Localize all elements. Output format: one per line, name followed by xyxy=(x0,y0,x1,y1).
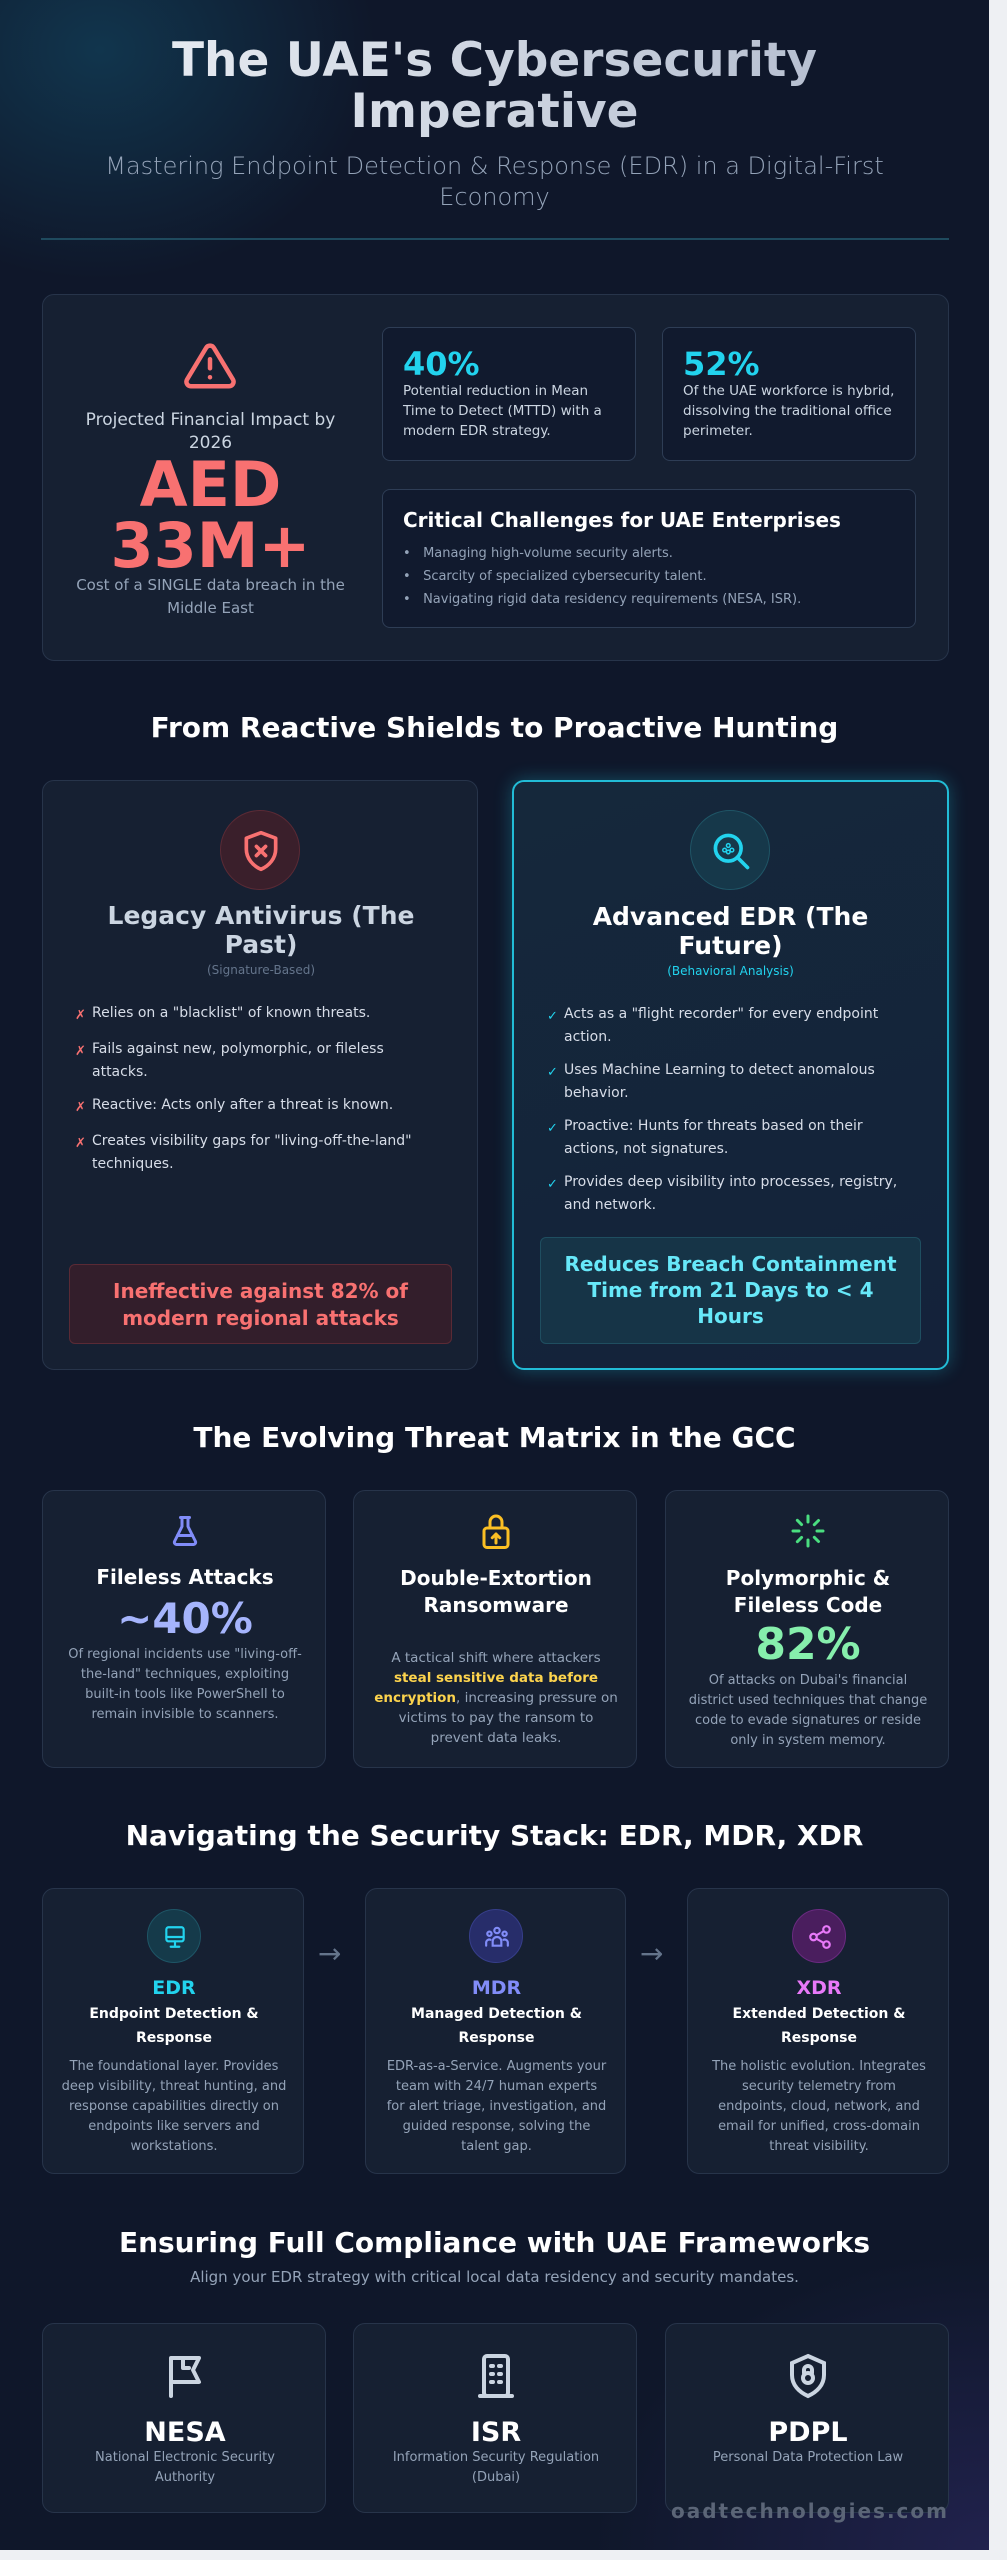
list: legacy drawbacks: Relies on a "blacklist" of known threats. xyxy=(92,1005,370,1021)
icon: spinner code xyxy=(792,1514,824,1548)
icon: shield x xyxy=(220,810,300,890)
panel: NESA: NESA xyxy=(144,2417,226,2448)
panel: NESA xyxy=(42,2323,326,2513)
panel: ISR xyxy=(353,2323,637,2513)
panel: polymorphic xyxy=(665,1490,949,1768)
panel: ISR: Information Security Regulation (Dubai) xyxy=(393,2450,599,2485)
panel: advanced EDR: ✓ xyxy=(547,1177,558,1192)
panel: NESA: National Electronic Security Authority xyxy=(95,2450,275,2485)
icon: people xyxy=(469,1909,523,1963)
heading: compliance: Ensuring Full Compliance with UAE Frameworks xyxy=(119,2226,870,2259)
challenges box: • Scarcity of specialized cybersecurity talent. xyxy=(403,569,707,584)
title: The UAE's Cybersecurity xyxy=(172,33,817,88)
panel: legacy antivirus: ✗ xyxy=(75,1008,86,1023)
stat: 40% xyxy=(382,327,636,461)
heading: reactive to proactive: From Reactive Shields to Proactive Hunting xyxy=(151,711,838,744)
title: Past) xyxy=(225,930,297,959)
arrow: → xyxy=(318,1937,341,1970)
icon: magnifier xyxy=(690,810,770,890)
list: legacy drawbacks: Creates visibility gaps for "living-off-the-land" techniques. xyxy=(92,1133,412,1172)
panel: fileless attacks xyxy=(42,1490,326,1768)
panel: PDPL: PDPL xyxy=(768,2417,848,2448)
challenges box xyxy=(382,489,916,628)
panel: advanced EDR: (Behavioral Analysis) xyxy=(667,964,794,978)
callout: ineffective xyxy=(69,1264,452,1344)
stat: 82% xyxy=(755,1619,861,1670)
list: legacy drawbacks xyxy=(75,1005,412,1172)
challenges box: Critical Challenges for UAE Enterprises xyxy=(403,508,841,532)
watermark: oadtechnologies.com xyxy=(671,2499,949,2523)
stat: ~40% xyxy=(117,1594,253,1643)
panel: MDR xyxy=(365,1888,626,2174)
list: EDR benefits: Provides deep visibility into processes, registry, and network. xyxy=(564,1174,897,1213)
stat: 40%: 40% xyxy=(403,345,480,383)
panel: double extortion: A tactical shift where attackers steal sensitive data before encryption, increasing pressure on victims to pay the ransom to prevent data leaks. xyxy=(374,1650,618,1746)
panel: MDR: EDR-as-a-Service. Augments your team with 24/7 human experts for alert triage, investigation, and guided response, solving the talent gap. xyxy=(387,2059,606,2154)
challenges box: • Managing high-volume security alerts. xyxy=(403,546,673,561)
panel: XDR: XDR xyxy=(796,1977,842,1999)
icon: building xyxy=(478,2354,514,2398)
panel: polymorphic: Fileless Code xyxy=(734,1593,882,1617)
panel: EDR: Endpoint Detection & Response xyxy=(89,2006,259,2046)
list: EDR benefits xyxy=(547,1006,897,1213)
panel: polymorphic: Polymorphic & xyxy=(726,1566,890,1590)
list: EDR benefits: Proactive: Hunts for threats based on their actions, not signatures. xyxy=(564,1118,863,1157)
panel: legacy antivirus: ✗ xyxy=(75,1136,86,1151)
panel: legacy antivirus: (Signature-Based) xyxy=(207,963,315,977)
icon: monitor xyxy=(147,1909,201,1963)
panel: advanced EDR xyxy=(512,780,949,1370)
big number xyxy=(111,448,310,582)
stat: 52%: Of the UAE workforce is hybrid, dissolving the traditional office perimeter. xyxy=(683,383,894,439)
heading: threat matrix: The Evolving Threat Matrix in the GCC xyxy=(193,1421,796,1454)
stat: 52% xyxy=(662,327,916,461)
challenges box: • Navigating rigid data residency requirements (NESA, ISR). xyxy=(403,592,801,607)
panel: EDR: The foundational layer. Provides deep visibility, threat hunting, and response capabilities directly on endpoints like servers and workstations. xyxy=(62,2059,286,2154)
title: Advanced EDR (The xyxy=(593,902,868,931)
stat: 52%: 52% xyxy=(683,345,760,383)
icon: shield lock xyxy=(790,2354,826,2398)
big number: AED xyxy=(140,448,281,521)
title xyxy=(108,901,414,959)
subtitle: Mastering Endpoint Detection & Response (EDR) in a Digital-First Economy xyxy=(105,152,884,211)
panel: MDR: MDR xyxy=(472,1977,521,1999)
panel: EDR xyxy=(42,1888,304,2174)
panel: PDPL: Personal Data Protection Law xyxy=(713,2450,903,2465)
panel: double extortion: Double-Extortion xyxy=(400,1566,592,1590)
panel: legacy antivirus: ✗ xyxy=(75,1044,86,1059)
label: projected impact: Projected Financial Impact by 2026 xyxy=(86,410,335,453)
callout: ineffective: Ineffective against 82% of modern regional attacks xyxy=(113,1279,408,1330)
panel: legacy antivirus xyxy=(42,780,478,1370)
panel: EDR: EDR xyxy=(152,1977,196,1999)
panel: advanced EDR: ✓ xyxy=(547,1065,558,1080)
panel: ISR: ISR xyxy=(471,2417,521,2448)
caption: Cost of a SINGLE data breach in the Middle East xyxy=(76,576,345,617)
icon: flag xyxy=(169,2356,202,2398)
heading: security stack: Navigating the Security Stack: EDR, MDR, XDR xyxy=(126,1819,863,1852)
compliance subtitle: Align your EDR strategy with critical local data residency and security mandates. xyxy=(190,2268,799,2286)
title: Future) xyxy=(678,931,783,960)
title xyxy=(592,902,868,960)
list: EDR benefits: Acts as a "flight recorder" for every endpoint action. xyxy=(564,1006,878,1045)
panel: double extortion: Ransomware xyxy=(423,1593,569,1617)
title: Imperative xyxy=(351,84,638,139)
panel: advanced EDR: ✓ xyxy=(547,1121,558,1136)
panel: XDR: The holistic evolution. Integrates security telemetry from endpoints, cloud, network, and email for unified, cross-domain threat visibility. xyxy=(712,2059,926,2154)
list: EDR benefits: Uses Machine Learning to detect anomalous behavior. xyxy=(564,1062,875,1101)
big number: 33M+ xyxy=(111,509,310,582)
panel: fileless attacks: Of regional incidents use "living-off-the-land" techniques, exploiting built-in tools like PowerShell to remain invisible to scanners. xyxy=(68,1647,302,1722)
panel: XDR xyxy=(687,1888,949,2174)
panel: MDR: Managed Detection & Response xyxy=(411,2006,582,2046)
panel: legacy antivirus: ✗ xyxy=(75,1100,86,1115)
panel: fileless attacks: Fileless Attacks xyxy=(96,1565,274,1589)
panel: PDPL xyxy=(665,2323,949,2513)
callout: containment time: Reduces Breach Containment Time from 21 Days to < 4 Hours xyxy=(564,1252,897,1328)
list: legacy drawbacks: Fails against new, polymorphic, or fileless attacks. xyxy=(92,1041,384,1080)
panel: financial impact xyxy=(42,294,949,661)
stat: 40%: Potential reduction in Mean Time to Detect (MTTD) with a modern EDR strategy. xyxy=(403,383,602,439)
panel: XDR: Extended Detection & Response xyxy=(733,2006,905,2046)
arrow: → xyxy=(640,1937,663,1970)
panel: advanced EDR: ✓ xyxy=(547,1009,558,1024)
icon: warning xyxy=(184,343,236,388)
panel: double extortion xyxy=(353,1490,637,1768)
icon: lock xyxy=(482,1514,510,1549)
title xyxy=(0,35,989,137)
panel: polymorphic: Of attacks on Dubai's financial district used techniques that change code to evade signatures or reside only in system memory. xyxy=(689,1673,927,1748)
callout: containment time xyxy=(540,1237,921,1344)
list: legacy drawbacks: Reactive: Acts only after a threat is known. xyxy=(92,1097,393,1113)
title: Legacy Antivirus (The xyxy=(108,901,414,930)
icon: share xyxy=(792,1909,846,1963)
icon: flask xyxy=(172,1516,198,1546)
